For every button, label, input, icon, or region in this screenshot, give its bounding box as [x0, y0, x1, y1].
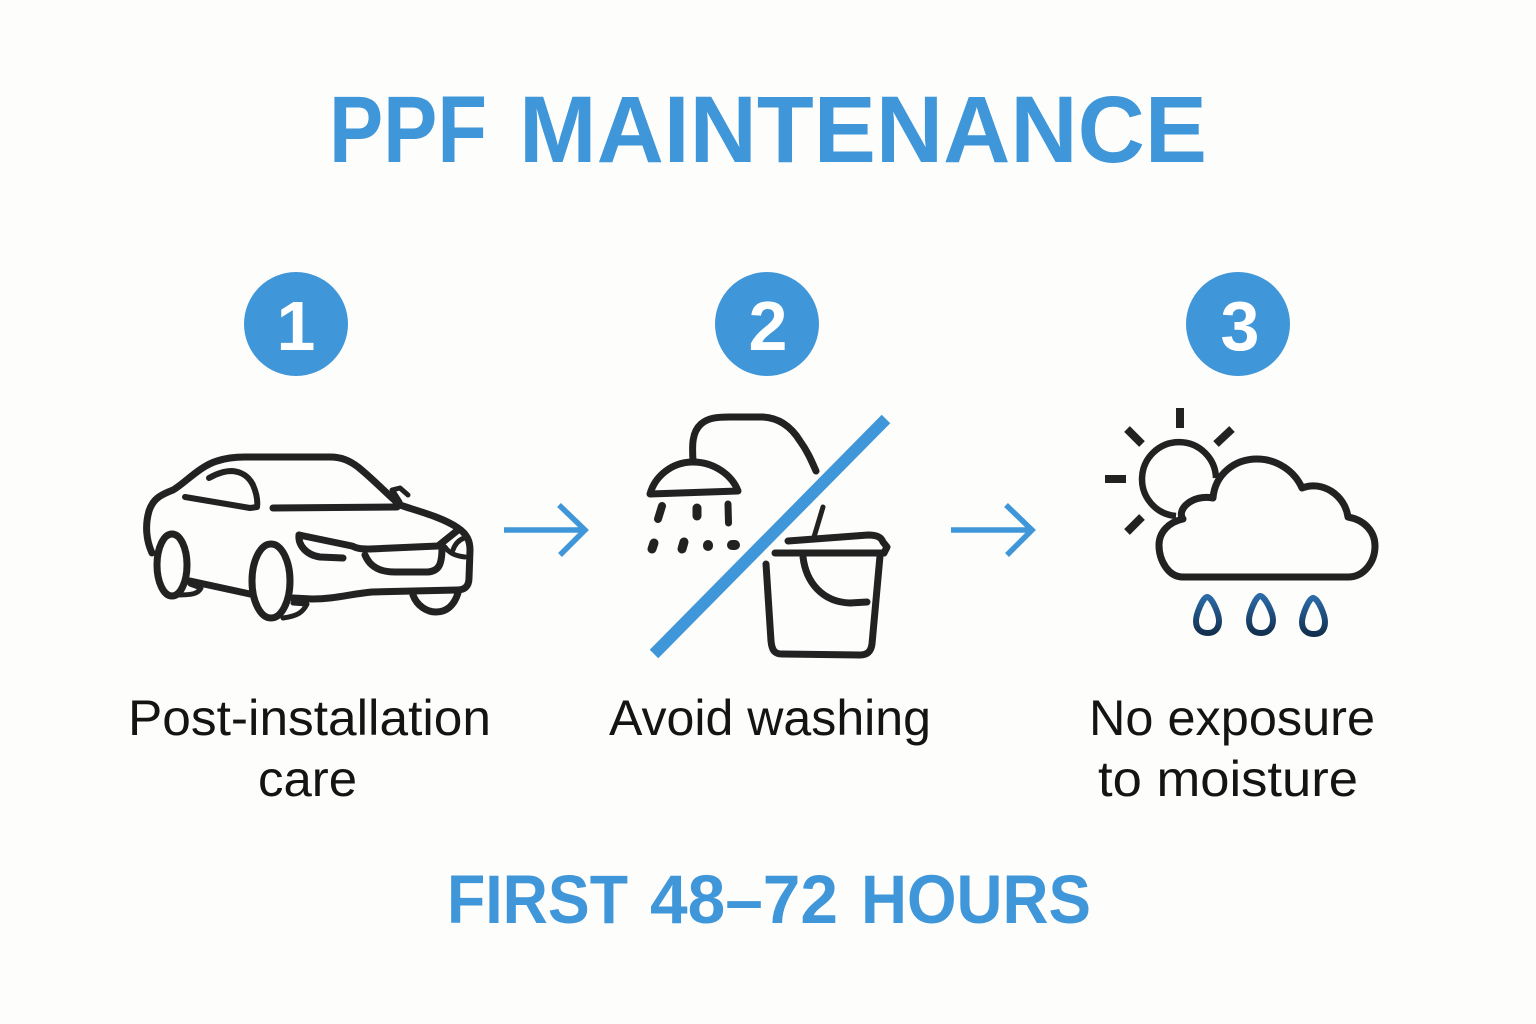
step 1 number badge	[244, 272, 348, 376]
step 1 number badge: 1	[277, 287, 315, 365]
arrow: step 2 to 3	[951, 505, 1032, 555]
icon: no washing	[650, 417, 887, 655]
step 2 number badge: 2	[749, 287, 787, 365]
rain drops	[1196, 596, 1325, 634]
label: no exposure to moisture	[1089, 690, 1375, 807]
icon: sun, cloud and rain	[1105, 408, 1375, 634]
label: post-installation care: Post-installation	[128, 690, 491, 746]
shower	[650, 417, 816, 549]
title: MAINTENANCE	[519, 77, 1207, 183]
footer: first 48-72 hours	[447, 861, 1091, 938]
footer: first 48-72 hours: FIRST	[447, 861, 628, 938]
label: post-installation care: care	[258, 751, 357, 807]
label: no exposure to moisture: to moisture	[1098, 751, 1358, 807]
label: post-installation care	[128, 690, 491, 807]
step 2 number badge	[715, 272, 819, 376]
prohibition slash	[654, 419, 886, 654]
footer: first 48-72 hours: 48–72	[650, 861, 838, 938]
arrow: step 1 to 2	[504, 505, 585, 555]
bucket	[766, 507, 887, 655]
cloud	[1159, 459, 1375, 577]
label: no exposure to moisture: No exposure	[1089, 690, 1375, 746]
footer: first 48-72 hours: HOURS	[861, 861, 1091, 938]
icon: car	[147, 457, 470, 618]
label: avoid washing: Avoid washing	[609, 690, 931, 746]
step 3 number badge	[1186, 272, 1290, 376]
sun	[1105, 408, 1232, 532]
step 3 number badge: 3	[1221, 287, 1259, 365]
title: PPF	[329, 77, 487, 183]
